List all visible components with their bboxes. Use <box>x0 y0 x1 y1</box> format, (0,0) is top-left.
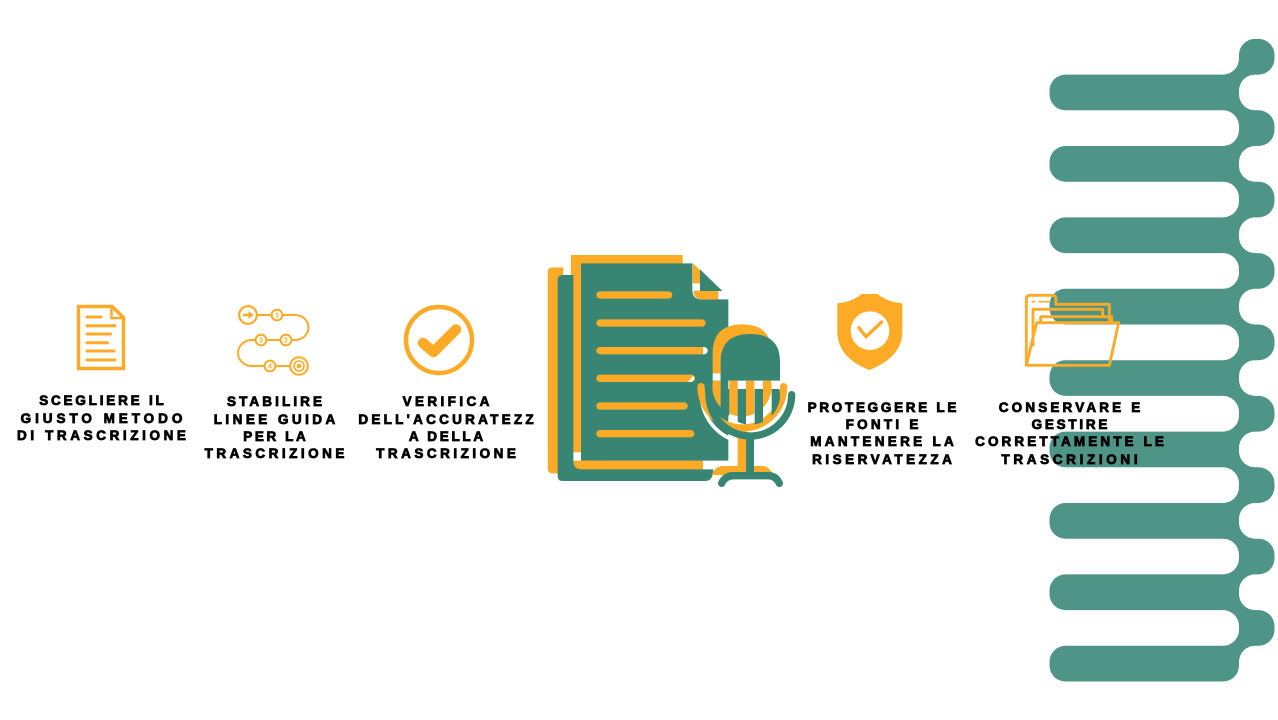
label: proteggere le fonti <box>808 400 959 467</box>
label: stabilire linee guida: LINEE GUIDA <box>214 412 339 427</box>
label: conservare e gestire: CONSERVARE E <box>999 400 1143 414</box>
icon: numbered path steps: 4 <box>268 364 272 370</box>
icon: numbered path steps: 2 <box>284 338 288 344</box>
label: proteggere le fonti: RISERVATEZZA <box>812 452 955 467</box>
label: scegliere il giusto metodo: GIUSTO METODO <box>21 411 186 426</box>
label: scegliere il giusto metodo: SCEGLIERE IL <box>39 393 167 408</box>
label: stabilire linee guida: TRASCRIZIONE <box>205 446 348 461</box>
icon: document <box>78 306 124 368</box>
label: conservare e gestire <box>975 400 1167 467</box>
microphone <box>701 324 792 483</box>
label: conservare e gestire: CORRETTAMENTE LE <box>975 434 1167 449</box>
icon: folder <box>1026 295 1119 365</box>
label: scegliere il giusto metodo <box>17 393 190 443</box>
label: stabilire linee guida: PER LA <box>243 429 308 444</box>
label: stabilire linee guida <box>204 394 348 461</box>
icon: numbered path steps <box>238 306 308 375</box>
label: verifica accuratezza: TRASCRIZIONE <box>376 446 519 461</box>
label: proteggere le fonti: MANTENERE LA <box>810 434 957 449</box>
icon: numbered path steps: 1 <box>275 312 279 320</box>
label: verifica accuratezza: DELL'ACCURATEZZ <box>358 412 537 427</box>
comb decoration: green serpentine shape <box>1050 39 1274 682</box>
label: stabilire linee guida: STABILIRE <box>227 394 325 409</box>
label: conservare e gestire: TRASCRIZIONI <box>1001 452 1141 467</box>
documents <box>548 255 728 481</box>
label: verifica accuratezza: A DELLA <box>409 429 486 444</box>
label: verifica accuratezza: VERIFICA <box>403 394 493 409</box>
label: conservare e gestire: GESTIRE <box>1032 417 1110 432</box>
label: proteggere le fonti: PROTEGGERE LE <box>808 400 959 414</box>
label: proteggere le fonti: FONTI E <box>846 417 922 432</box>
icon: shield with check <box>837 294 902 370</box>
label: scegliere il giusto metodo: DI TRASCRIZIONE <box>17 428 190 443</box>
label: verifica accuratezza <box>358 394 537 461</box>
central illustration: documents and microphone <box>548 255 792 483</box>
icon: numbered path steps: 3 <box>259 338 263 344</box>
icon: check mark in circle <box>406 307 472 373</box>
